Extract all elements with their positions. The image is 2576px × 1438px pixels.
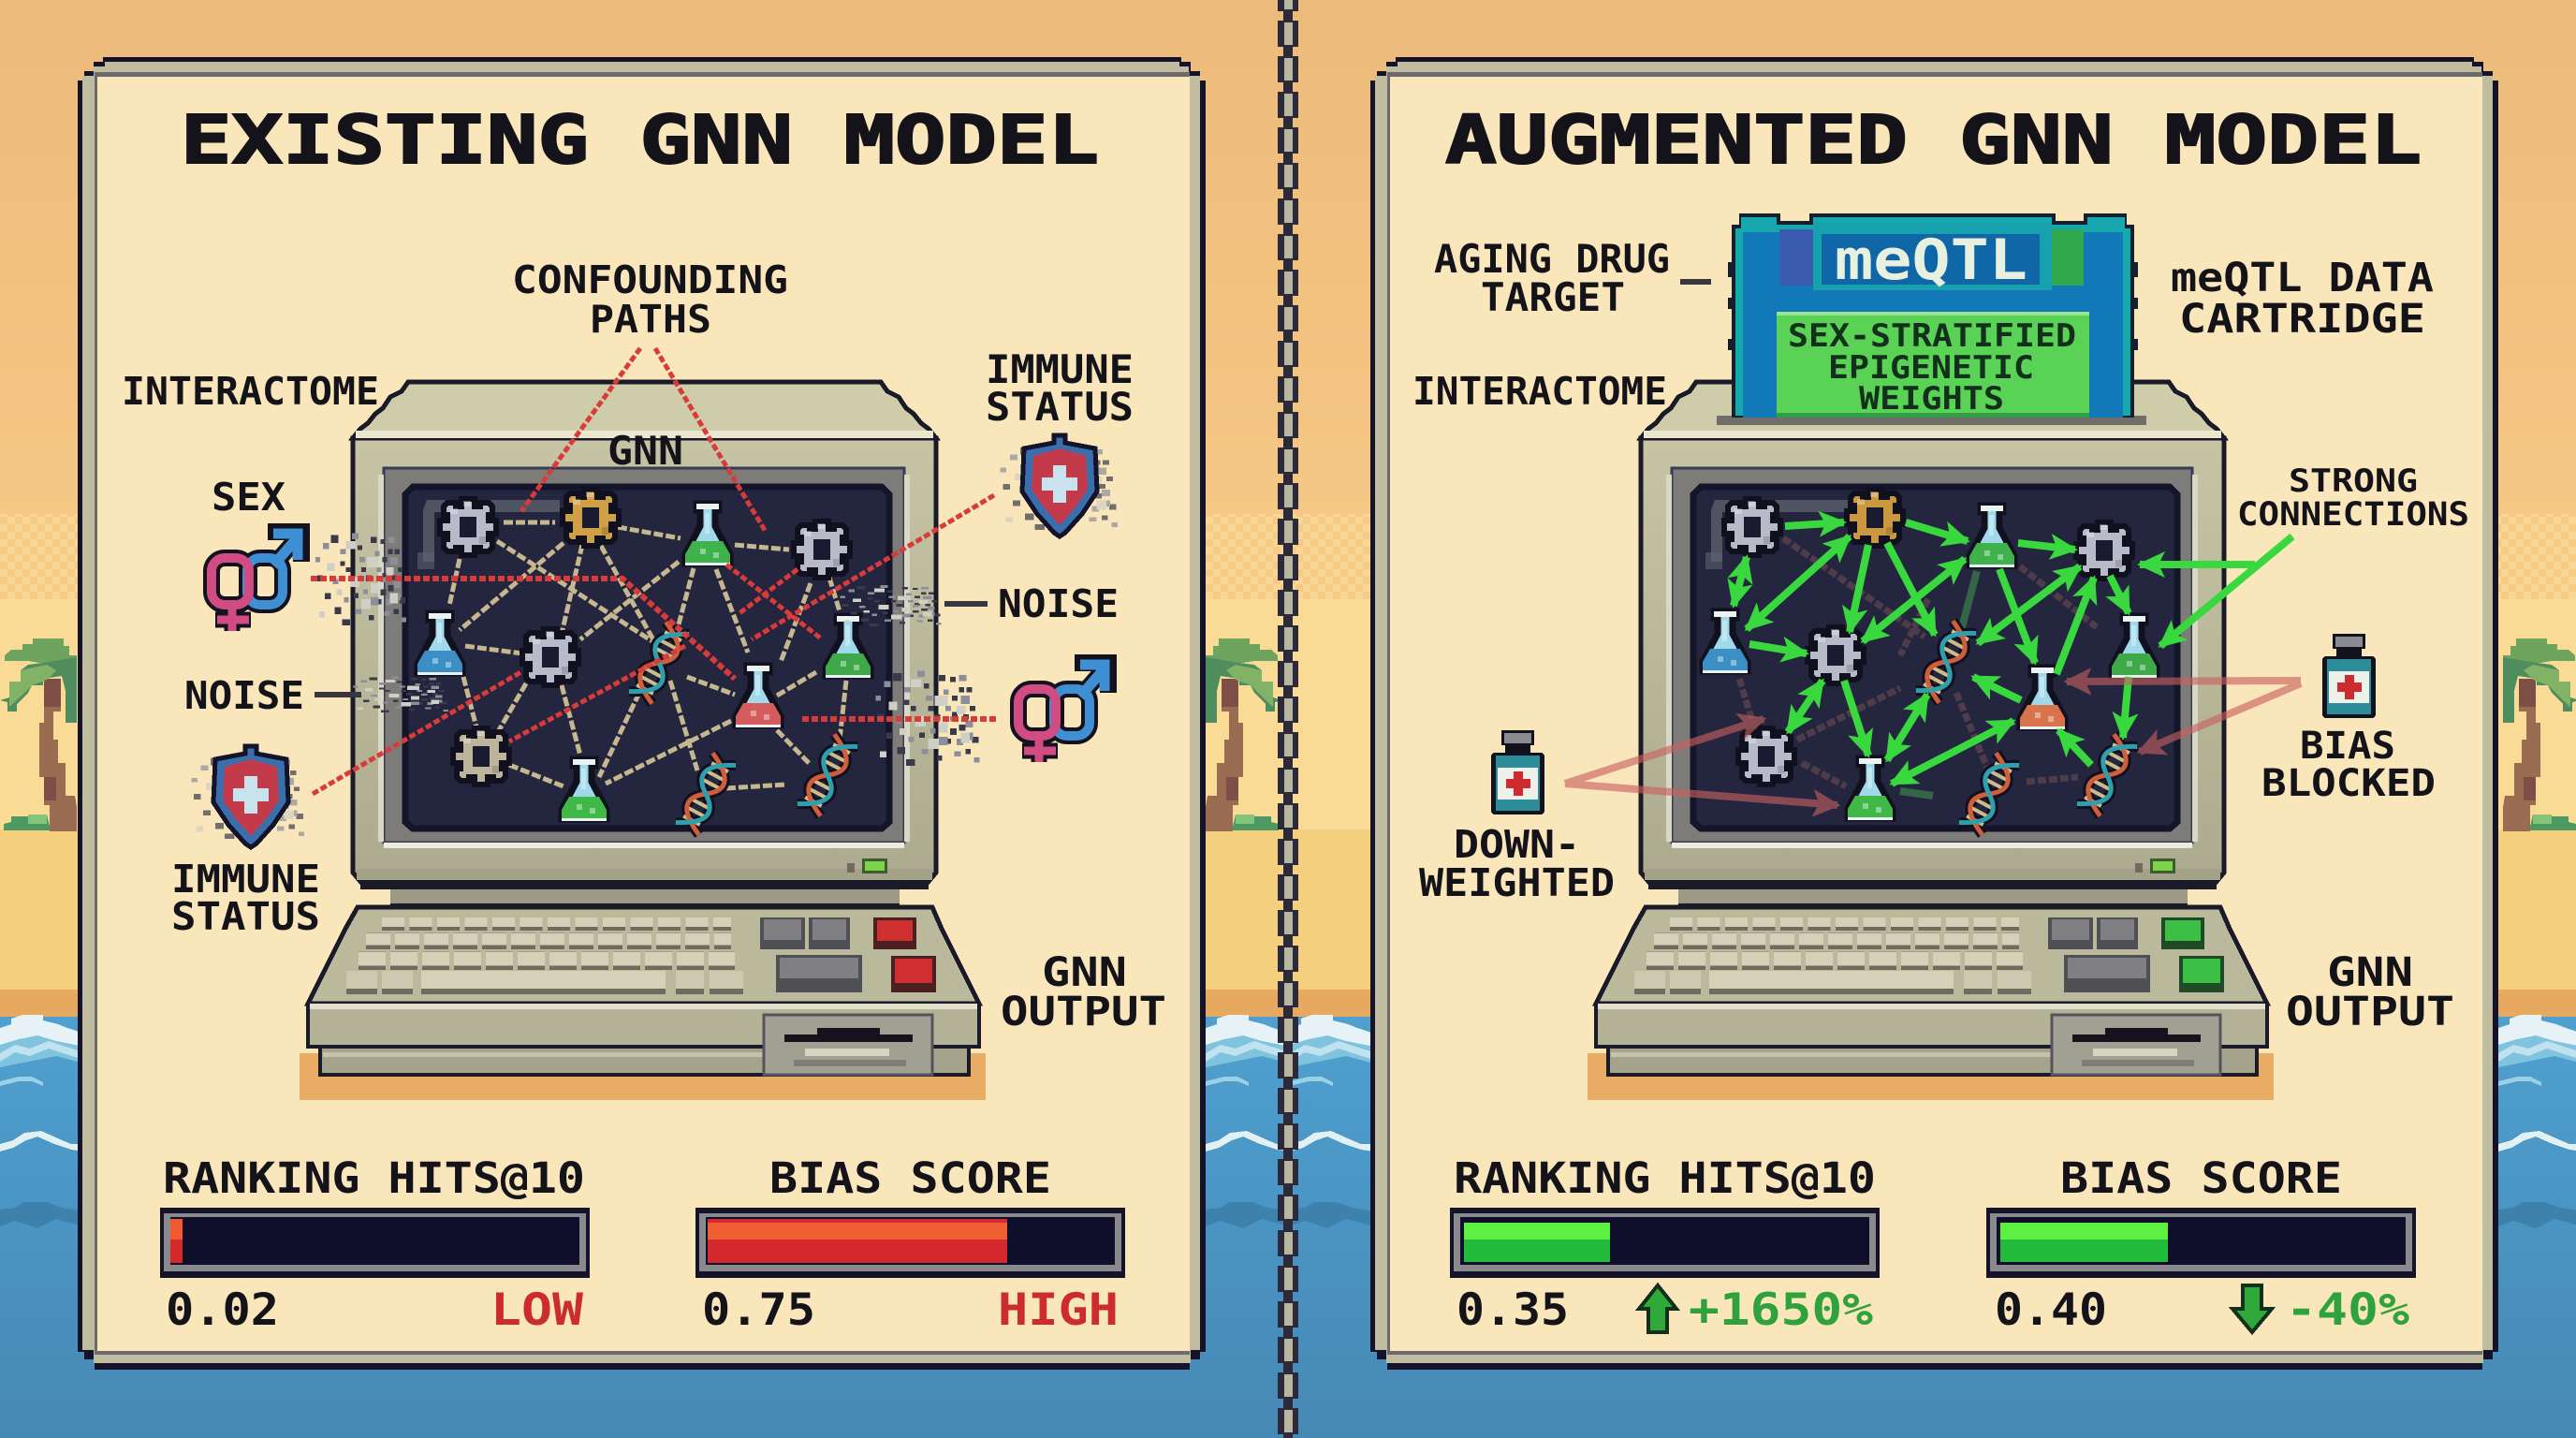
label: sex: SEX [212,475,285,520]
label: noise right: NOISE [998,581,1119,626]
red function keys [873,917,936,992]
label: immune status lower: STATUS [171,894,320,939]
faint blocked paths [1739,538,2097,786]
metric: ranking hits: 0.02 [166,1284,279,1336]
label: aging drug target: TARGET [1481,274,1625,320]
metric: bias score: 0.40 [1995,1284,2107,1336]
label: down-weighted: DOWN- [1454,822,1580,867]
interactome: nodes [417,490,871,835]
label: immune status upper: IMMUNE [986,346,1134,392]
label: bias blocked: BLOCKED [2261,762,2436,805]
palm trees [0,638,2576,831]
label: noise left: NOISE [184,673,304,718]
label: GNN output: OUTPUT [1001,989,1166,1035]
label: GNN output [2286,949,2454,1035]
label: down-weighted [1419,822,1615,905]
metric: ranking hits [1450,1153,1880,1336]
metric: bias score [1986,1153,2416,1336]
metric: bias score: HIGH [998,1284,1119,1336]
interactome: edges [449,522,846,788]
green function keys [2161,917,2224,992]
computer: monitor [353,382,936,908]
label: noise left [184,673,361,718]
cartridge label: SEX-STRATIFIED [1788,317,2076,355]
label: meQTL data cartridge [2171,255,2434,343]
metric: ranking hits: 0.35 [1456,1284,1569,1336]
label: confounding paths: PATHS [590,297,711,342]
label: aging drug target: AGING DRUG [1434,236,1670,282]
title: AUGMENTED GNN MODEL [1445,101,2422,179]
computer: keyboard and base [300,907,986,1100]
power LED [847,858,887,873]
label: meQTL data cartridge: CARTRIDGE [2179,296,2425,343]
icon: sex symbols [212,532,301,631]
cartridge label: WEIGHTS [1859,380,2004,418]
label: immune status upper [986,346,1134,430]
title: EXISTING GNN MODEL [181,101,1099,179]
label: confounding paths: CONFOUNDING [512,257,788,302]
label: confounding paths [512,257,788,342]
icon: shield upper with noise [1001,435,1118,536]
label: strong connections [2237,462,2469,534]
metric: bias score: 0.75 [702,1284,815,1336]
label: GNN output [1001,949,1166,1035]
metric: ranking hits: RANKING HITS@10 [163,1153,585,1203]
icon: bottle left [1491,730,1544,814]
label: immune status lower [171,857,320,939]
cartridge label: EPIGENETIC [1828,349,2034,387]
label: strong connections: CONNECTIONS [2237,496,2469,534]
cartridge title: meQTL [1835,227,2027,293]
metric: bias score [695,1153,1125,1336]
gauge: bias [695,1208,1125,1278]
label: GNN on monitor: GNN [607,428,683,474]
gauge: bias [1986,1208,2416,1278]
metric: bias score: BIAS SCORE [769,1153,1051,1203]
label: meQTL data cartridge: meQTL DATA [2171,255,2434,301]
label: bias blocked: BIAS [2300,725,2395,768]
power LED [2135,858,2175,873]
label: strong connections: STRONG [2289,462,2418,500]
label: aging drug target [1434,236,1711,320]
metric: ranking hits: +1650% [1689,1284,1873,1336]
label: immune status lower: IMMUNE [171,857,320,902]
faint green paths [1900,571,1977,796]
metric: ranking hits [160,1153,590,1336]
meQTL data cartridge [1717,213,2146,425]
label: GNN output: GNN [1042,949,1127,996]
gauge: hits [1450,1208,1880,1278]
metric: ranking hits: RANKING HITS@10 [1454,1153,1876,1203]
gauge: hits [160,1208,590,1278]
computer: monitor [1641,382,2224,908]
label: GNN output: OUTPUT [2286,989,2454,1035]
metric: bias score: BIAS SCORE [2060,1153,2342,1203]
cartridge label [1788,317,2076,418]
computer: keyboard and base [1588,907,2274,1100]
chain divider [1278,0,1298,1438]
icon: bottle right [2322,634,2376,718]
confounding red paths [311,348,998,794]
label: GNN output: GNN [2327,949,2413,996]
strong green connection arrows [1734,522,2292,784]
interactome: nodes [1703,490,2157,835]
label: immune status upper: STATUS [986,384,1134,430]
icon: shield lower with noise [192,746,304,847]
label: interactome: INTERACTOME [122,369,379,414]
icon: up arrow [1639,1285,1676,1332]
label: noise right [944,581,1119,626]
waves [0,1015,2576,1228]
label: interactome: INTERACTOME [1412,369,1667,414]
label: bias blocked [2261,725,2436,805]
blocked red arrows [1565,681,2301,805]
icon: down arrow [2232,1285,2272,1332]
noise clouds [315,533,979,766]
panel: augmented GNN model [1370,57,2498,1370]
icon: sex symbols lower [1018,663,1108,762]
metric: bias score: -40% [2286,1284,2409,1336]
label: down-weighted: WEIGHTED [1419,860,1615,905]
panel: existing GNN model [78,57,1206,1370]
metric: ranking hits: LOW [490,1284,584,1336]
